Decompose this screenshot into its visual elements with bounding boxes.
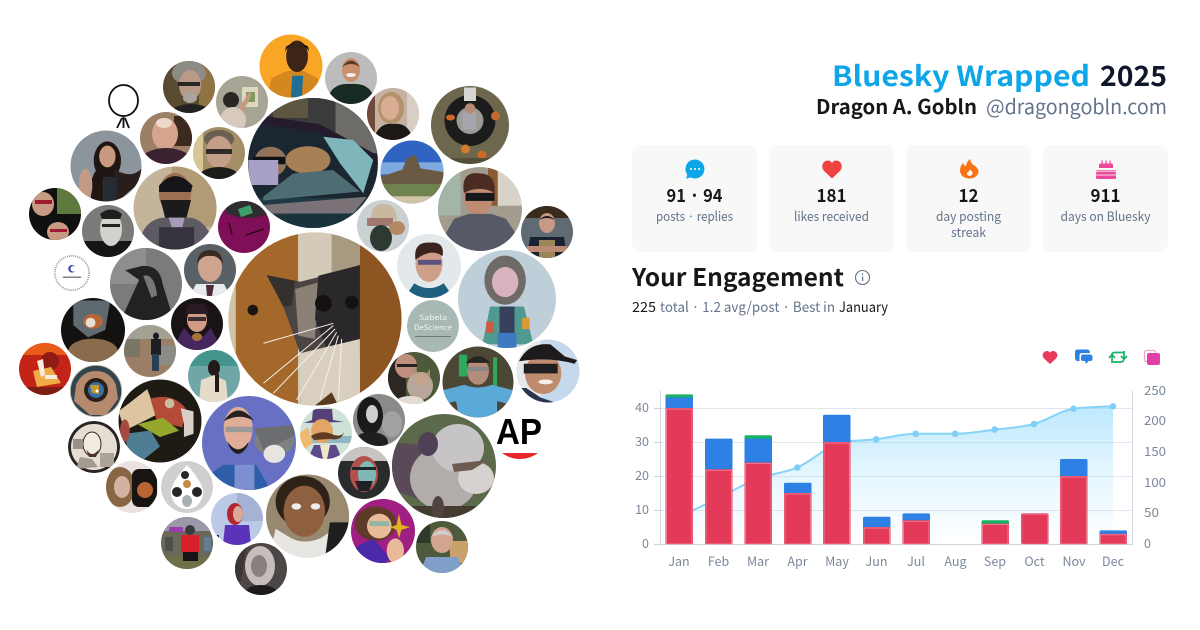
- avatar: person in red shirt at festival: [161, 517, 213, 569]
- avatar: man with sunglasses in grey shirt: [438, 167, 522, 251]
- user name and handle: [816, 91, 1167, 120]
- avatar: stick figure outline: [109, 85, 138, 128]
- avatar: man in overalls: [521, 206, 573, 258]
- avatar: black and white crow: [110, 248, 182, 320]
- avatar: smiling woman selfie: [266, 475, 349, 557]
- panel: days on Bluesky: days on Bluesky: [1060, 206, 1151, 225]
- month labels: Nov: [1062, 551, 1086, 570]
- panel: days on Bluesky: 911: [1090, 182, 1120, 208]
- cumulative line: [679, 406, 1113, 517]
- month labels: Mar: [747, 551, 769, 570]
- bar: Jun: [863, 517, 890, 544]
- engagement summary: total · 1.2 avg/post · Best in: [660, 297, 835, 317]
- avatar: large photo of a cat behind a door: [228, 232, 402, 406]
- avatar: red comic character: [19, 343, 71, 395]
- panel: days on Bluesky: [1043, 145, 1168, 252]
- bar: May: [823, 415, 850, 544]
- combined bar and line chart: [635, 380, 1166, 570]
- engagement summary: 225: [632, 297, 656, 317]
- panel: likes received: likes received: [794, 206, 869, 225]
- chart grid and axes: [660, 408, 1133, 510]
- right axis labels: 150: [1144, 441, 1166, 460]
- avatar: people and dog in a car: [248, 98, 378, 228]
- icon: info: [856, 270, 870, 284]
- right axis labels: 50: [1144, 502, 1159, 521]
- avatar: doctor in white coat: [184, 244, 236, 296]
- right axis labels: [1144, 380, 1166, 552]
- avatar: bird logo in grey ring: [161, 461, 213, 513]
- left axis labels: [635, 397, 649, 552]
- avatar: cartoon woman on magenta: [351, 499, 415, 563]
- title: 2025: [1100, 55, 1167, 95]
- line markers: [794, 403, 1116, 471]
- avatar: red panda costume: [61, 298, 125, 363]
- left axis labels: 20: [635, 465, 649, 484]
- avatar: bald man: [140, 112, 192, 164]
- icon: flame: [960, 159, 979, 178]
- right axis labels: 200: [1144, 410, 1166, 429]
- month labels: Jan: [668, 551, 690, 570]
- icon: repost legend: [1109, 351, 1127, 363]
- avatar: portraits with red eye makeup: [29, 188, 81, 242]
- avatar: older man in blue shirt: [443, 347, 513, 417]
- panel: posts and replies: 91 · 94: [666, 182, 723, 208]
- heading: your engagement: Your Engagement: [631, 258, 844, 293]
- panel: posts and replies: [632, 145, 757, 252]
- avatar: red haired woman: [211, 493, 263, 545]
- panel: likes received: 181: [816, 182, 846, 208]
- avatar: child at gallery wall: [216, 76, 268, 133]
- avatar: cartoon man with shark on periwinkle: [202, 396, 296, 490]
- avatar: woman in white by pool: [188, 350, 240, 402]
- avatar: man in black glasses: [193, 127, 245, 179]
- panel: day posting streak: 12: [958, 182, 978, 208]
- panel: likes received: [769, 145, 894, 252]
- avatar: black and white bearded man: [82, 205, 134, 257]
- avatar: woman with purple hair and glasses: [171, 298, 223, 350]
- month labels: Sep: [984, 551, 1006, 570]
- avatar: man with purple glasses: [397, 234, 461, 298]
- avatar: woman with long dark hair: [71, 131, 141, 201]
- right axis labels: 100: [1144, 472, 1166, 491]
- avatar: purple cartoon with hat: [218, 201, 270, 253]
- avatar: Sabela DeScience logo: DeScience: [414, 323, 452, 333]
- left axis labels: 10: [635, 499, 649, 518]
- icon: birthday cake: [1096, 160, 1116, 179]
- month labels: Jun: [866, 551, 887, 570]
- avatar cluster: [19, 34, 580, 601]
- right axis labels: 250: [1144, 380, 1166, 399]
- avatar: AP logo: AP: [496, 411, 542, 452]
- icon: heart: [822, 160, 842, 178]
- avatar: parrot close-up: [119, 380, 201, 462]
- right axis labels: 0: [1144, 533, 1151, 552]
- avatar: grey haired man with glasses: [163, 61, 215, 113]
- avatar: child's drawing of a girl: [458, 250, 556, 348]
- user name and handle: Dragon A. Gobln: [816, 91, 977, 120]
- icon: replies legend: [1075, 350, 1092, 364]
- left axis labels: 30: [635, 431, 649, 450]
- bar: Apr: [784, 483, 812, 544]
- title: Bluesky Wrapped: [832, 55, 1090, 95]
- cumulative area: [679, 406, 1113, 544]
- bar: Mar: [744, 435, 772, 544]
- avatar: woman in black cap and sunglasses: [516, 339, 580, 403]
- avatar: person hiding face under a cap: [357, 200, 409, 252]
- month labels: Dec: [1102, 551, 1125, 570]
- avatar: small round logo: [54, 255, 90, 291]
- avatar: hands holding a globe: [70, 365, 122, 417]
- avatar: blonde woman: [367, 88, 419, 140]
- bar: Jan: [666, 394, 693, 544]
- bar: Feb: [705, 439, 732, 544]
- panel: day posting streak: streak: [951, 222, 987, 241]
- avatar: man with calico cat: [388, 352, 440, 408]
- stacked bars: [666, 394, 1127, 544]
- panel: posts and replies: posts · replies: [656, 206, 733, 225]
- avatar: black and white blonde woman: [235, 543, 287, 601]
- avatar: man on orange: [259, 34, 323, 98]
- bar: Sep: [982, 520, 1009, 544]
- month labels: May: [825, 551, 849, 570]
- icon: chat bubble: [685, 159, 704, 179]
- month labels: Apr: [787, 551, 808, 570]
- month labels: Oct: [1024, 551, 1045, 570]
- avatar: giant cow statue: [392, 414, 496, 520]
- avatar: man in black shirt: [325, 52, 377, 104]
- left axis labels: 0: [642, 533, 649, 552]
- bar: Jul: [902, 513, 930, 544]
- avatar: desert mountain: [380, 140, 444, 204]
- chart legend icons: [1043, 350, 1160, 365]
- user name and handle: @dragongobln.com: [986, 91, 1167, 120]
- icon: copy legend: [1144, 350, 1160, 365]
- avatar: woman with planet mug: [105, 461, 158, 513]
- month labels: Aug: [944, 551, 967, 570]
- avatar: man in tyre with pumpkins: [431, 86, 509, 164]
- left axis labels: 40: [635, 397, 649, 416]
- avatar: cartoon man with moustache and purple hat: [300, 407, 352, 459]
- bar: Dec: [1100, 530, 1127, 544]
- avatar: Sabela DeScience logo: Sabela: [419, 313, 447, 323]
- month labels: Feb: [708, 551, 729, 570]
- bar: Oct: [1021, 513, 1048, 544]
- avatar: glitched 3D man: [338, 447, 390, 499]
- month labels: [668, 551, 1125, 570]
- bar: Nov: [1060, 459, 1088, 544]
- avatar: woman in autumn forest: [124, 325, 176, 377]
- icon: heart legend: [1043, 351, 1057, 364]
- avatar: man in black mask and waistcoat: [134, 167, 216, 249]
- avatar: comic portrait of bearded man: [68, 421, 120, 473]
- panel: day posting streak: [906, 145, 1031, 252]
- month labels: Jul: [907, 551, 925, 570]
- avatar: smiling older man in plaid: [416, 521, 468, 573]
- panel: day posting streak: day posting: [936, 206, 1002, 225]
- engagement summary: January: [839, 297, 889, 317]
- avatar: Sabela DeScience logo: [407, 300, 459, 352]
- avatar: black and white woman with cat: [353, 394, 405, 446]
